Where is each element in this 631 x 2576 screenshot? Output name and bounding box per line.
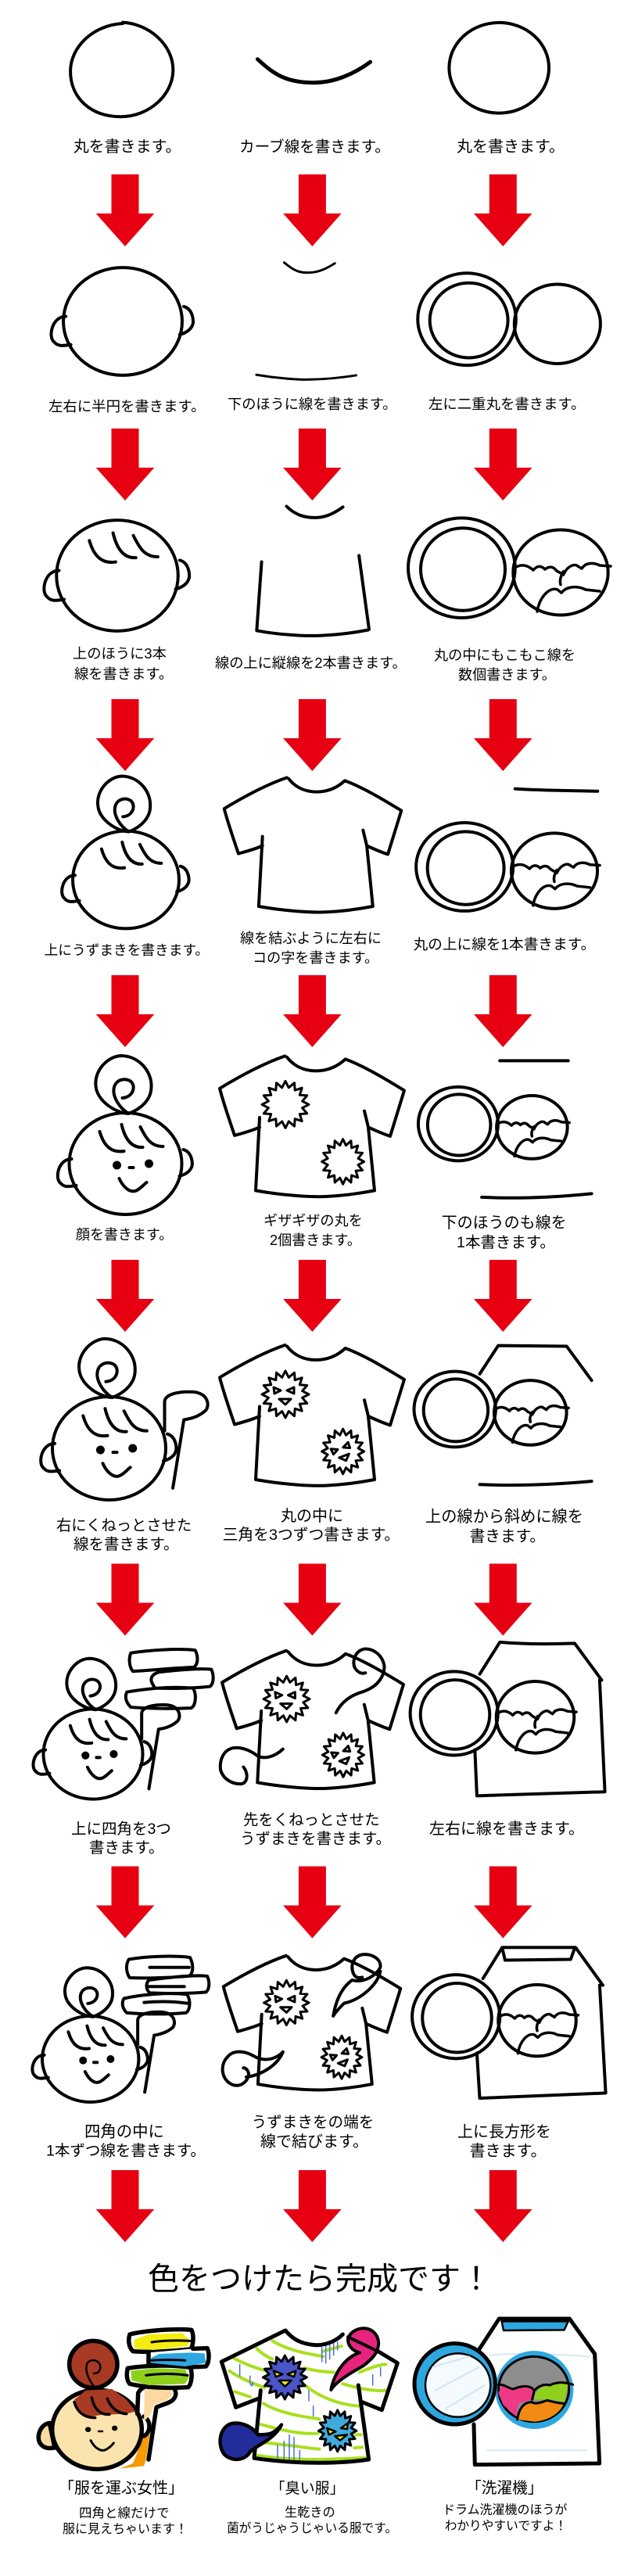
step 6: washer body lines: [480, 1346, 592, 1485]
final captions: washer: わかりやすいですよ！: [445, 2519, 567, 2533]
step 5: shirt with germs: [220, 1056, 404, 1197]
step captions: 下のほうのも線を: [442, 1214, 567, 1232]
step 6: woman with arm: [41, 1339, 208, 1500]
step captions: 左に二重丸を書きます。: [428, 396, 585, 412]
final captions: woman: 四角と線だけで: [79, 2506, 169, 2520]
step 8: washer with clothes: [412, 1975, 578, 2058]
step 7: shirt swirls: [220, 1649, 385, 1784]
step captions: 線を結ぶように左右に: [240, 931, 382, 946]
step captions: 書きます。: [470, 1528, 545, 1545]
step 8: washer body with lid: [477, 1947, 606, 2098]
step captions: 四角の中に: [84, 2122, 164, 2141]
step captions: 先をくねっとさせた: [243, 1811, 380, 1828]
step captions: うずまきをの端を: [252, 2114, 374, 2131]
step captions: カーブ線を書きます。: [239, 138, 390, 156]
step 2: shirt neck and hem: [256, 263, 357, 379]
step 4: washer top line: [515, 789, 597, 791]
final captions: washer: [443, 2480, 568, 2533]
step captions: 上にうずまきを書きます。: [45, 942, 209, 958]
step 5: washer with clothes: [418, 1087, 569, 1161]
step captions: うずまきを書きます。: [240, 1830, 391, 1847]
step 8: woman with arm: [32, 1968, 174, 2102]
step 5: washer body lines: [482, 1060, 592, 1198]
step 8: shirt with germ faces: [224, 1956, 400, 2090]
step captions: 1本書きます。: [457, 1234, 555, 1251]
step 4: washer with clothes: [416, 823, 600, 911]
step 7: woman with arm: [34, 1659, 179, 1799]
step captions: 丸の中に: [281, 1507, 343, 1525]
step captions: 書きます。: [89, 1839, 164, 1857]
step captions: 書きます。: [470, 2142, 547, 2160]
down arrows column 3: [474, 174, 532, 2242]
step captions: 線を書きます。: [74, 666, 173, 682]
down arrows column 2: [283, 174, 342, 2242]
step captions: 下のほうに線を書きます。: [228, 396, 396, 412]
step 5: woman with face: [58, 1056, 192, 1214]
down arrows column 1: [96, 174, 154, 2242]
step 3: shirt body lines: [256, 506, 369, 636]
title: 色をつけたら完成です！: [148, 2262, 492, 2296]
step captions: 三角を3つずつ書きます。: [223, 1527, 400, 1544]
step 2: washer double circle: [418, 273, 601, 365]
step captions: コの字を書きます。: [253, 950, 378, 966]
step 7: washer with clothes: [411, 1671, 576, 1756]
final captions: washer: ドラム洗濯機のほうが: [443, 2502, 568, 2517]
step 4: shirt outline: [224, 777, 401, 912]
step captions: ギザギザの丸を: [264, 1213, 363, 1229]
step 6: washer with clothes: [414, 1372, 568, 1447]
final captions: woman: 服に見えちゃいます！: [63, 2522, 188, 2536]
step 3: washer with clothes: [408, 518, 611, 618]
step captions: 線を書きます。: [73, 1536, 179, 1553]
step 7: shirt with germ faces: [222, 1651, 403, 1788]
step captions: 2個書きます。: [270, 1232, 361, 1248]
step captions: 上のほうに3本: [73, 645, 167, 662]
step captions: 丸を書きます。: [457, 138, 565, 156]
step captions: 左右に線を書きます。: [429, 1820, 584, 1838]
step captions: 丸を書きます。: [73, 138, 181, 156]
step 1: washer circle: [449, 23, 549, 113]
final captions: shirt: 菌がうじゃうじゃいる服です。: [227, 2521, 397, 2535]
step captions: 線の上に縦線を2本書きます。: [215, 655, 407, 671]
final: smelly shirt with colours: [220, 2328, 397, 2463]
final captions: shirt: 生乾きの: [285, 2506, 335, 2520]
final captions: woman: [59, 2479, 188, 2536]
step 1: shirt neck curve: [257, 59, 371, 83]
step 7: stacked clothes rectangles: [126, 1649, 213, 1709]
step captions: 上に四角を3つ: [71, 1821, 171, 1838]
step captions: 1本ずつ線を書きます。: [46, 2143, 206, 2160]
step 2: woman head with ears: [52, 267, 193, 375]
step captions: 顔を書きます。: [76, 1227, 173, 1243]
step captions: 上に長方形を: [457, 2122, 551, 2141]
step 1: woman circle: [70, 23, 173, 117]
step captions: [45, 138, 595, 2160]
final captions: woman: 「服を運ぶ女性」: [59, 2479, 184, 2497]
step captions: 左右に半円を書きます。: [48, 398, 205, 414]
step captions: 上の線から斜めに線を: [425, 1508, 583, 1526]
step captions: 丸の中にもこもこ線を: [434, 648, 575, 663]
step 4: woman head with bun: [62, 777, 189, 928]
step captions: 数個書きます。: [458, 667, 556, 683]
step 3: woman head with bangs: [44, 520, 189, 631]
final: coloured woman carrying clothes: [38, 2330, 209, 2469]
step 7: washer body: [475, 1642, 605, 1796]
step 6: shirt with germ faces: [220, 1345, 404, 1486]
step captions: 右にくねっとさせた: [56, 1517, 192, 1534]
step 8: shirt swirl shapes: [223, 1954, 381, 2086]
step captions: 丸の上に線を1本書きます。: [413, 936, 595, 953]
step captions: 線で結びます。: [260, 2133, 368, 2151]
final captions: washer: 「洗濯機」: [466, 2480, 543, 2497]
final captions: shirt: 「臭い服」: [271, 2480, 345, 2497]
final captions: shirt: [227, 2480, 397, 2535]
step 8: stacked clothes with lines: [123, 1957, 209, 2014]
final: washing machine with colours: [414, 2319, 600, 2465]
